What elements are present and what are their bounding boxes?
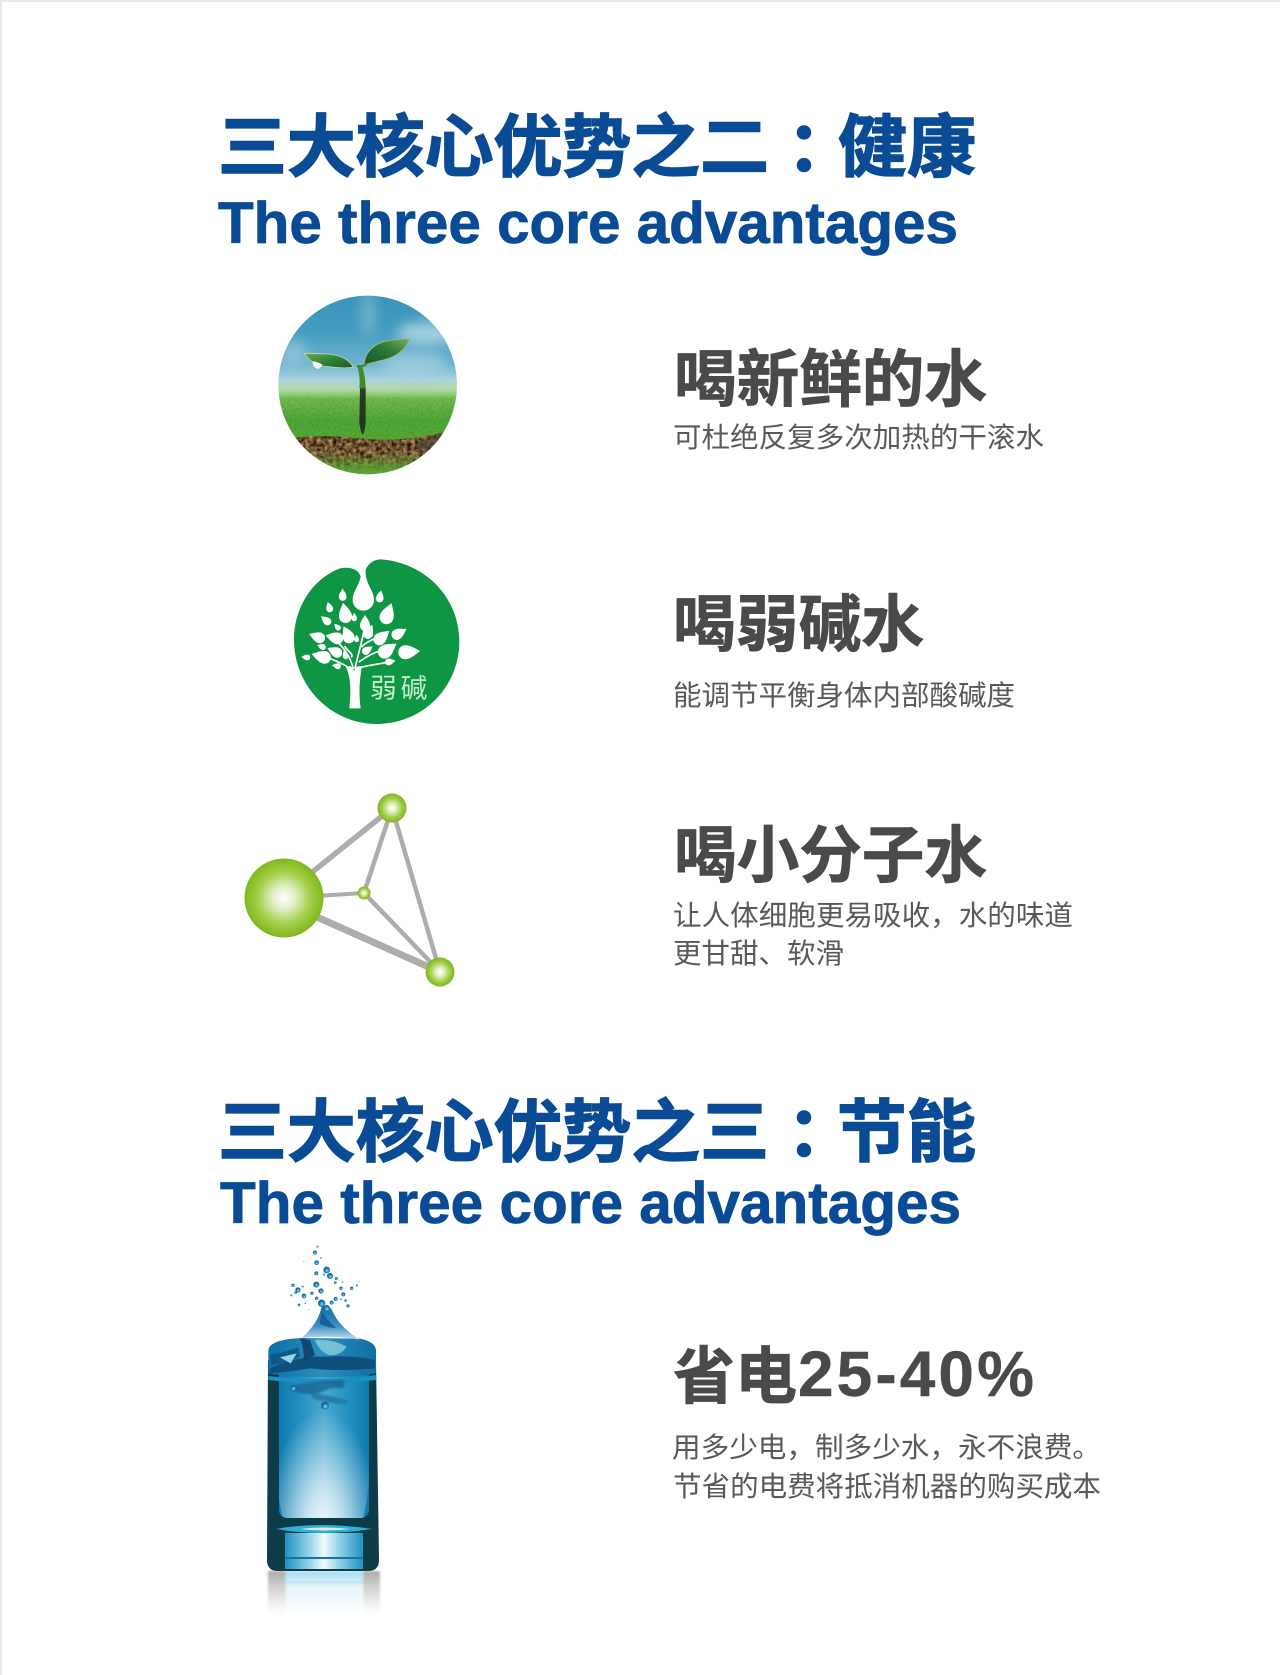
title: advantage three, energy saving: 节能 [837,1095,976,1171]
title: advantage three, energy saving: ： [787,1095,855,1171]
icon: seedling in a round landscape [277,290,458,477]
icon: green molecule [244,794,454,986]
title: advantage three, energy saving: 三大核心优势之三 [218,1095,769,1171]
seedling [304,339,410,435]
heading: drink fresh water: 喝新鲜的水 [674,346,987,415]
subtitle: the three core advantages: The three core advantages [220,1171,961,1236]
text: fresh water description: 可杜绝反复多次加热的干滚水 [673,422,1044,453]
glass body [267,1360,379,1571]
heading: save electricity 25-40%: 25-40% [798,1338,1034,1410]
text: energy saving description: 用多少电，制多少水，永不浪费。 [672,1432,1101,1463]
text: small molecule water description: 更甘甜、软滑 [673,938,844,969]
subtitle: the three core advantages: The three core advantages [218,191,958,256]
icon: glass of water with splash [267,1246,380,1615]
droplets [290,1246,359,1312]
title: advantage two, health: ： [787,110,855,186]
label: weak alkaline: 弱碱 [370,673,427,703]
title: advantage two, health: 三大核心优势之二 [218,110,769,186]
heading: save electricity 25-40%: 省电 [673,1343,797,1412]
text: small molecule water description: 让人体细胞更易吸收，水的味道 [673,900,1073,931]
text: alkaline water description: 能调节平衡身体内部酸碱度 [673,680,1015,711]
reflection [268,1571,380,1615]
text: energy saving description: 节省的电费将抵消机器的购买成本 [673,1471,1101,1502]
text: small molecule water description [673,900,1073,969]
icon: alkaline tree logo [294,559,459,724]
title: advantage two, health: 健康 [838,110,976,186]
text: energy saving description [672,1432,1101,1502]
heading: save electricity 25-40% [673,1338,1034,1412]
water crown and splash [268,1246,376,1410]
heading: drink small molecule water: 喝小分子水 [674,822,987,891]
heading: drink weak alkaline water: 喝弱碱水 [673,591,924,660]
